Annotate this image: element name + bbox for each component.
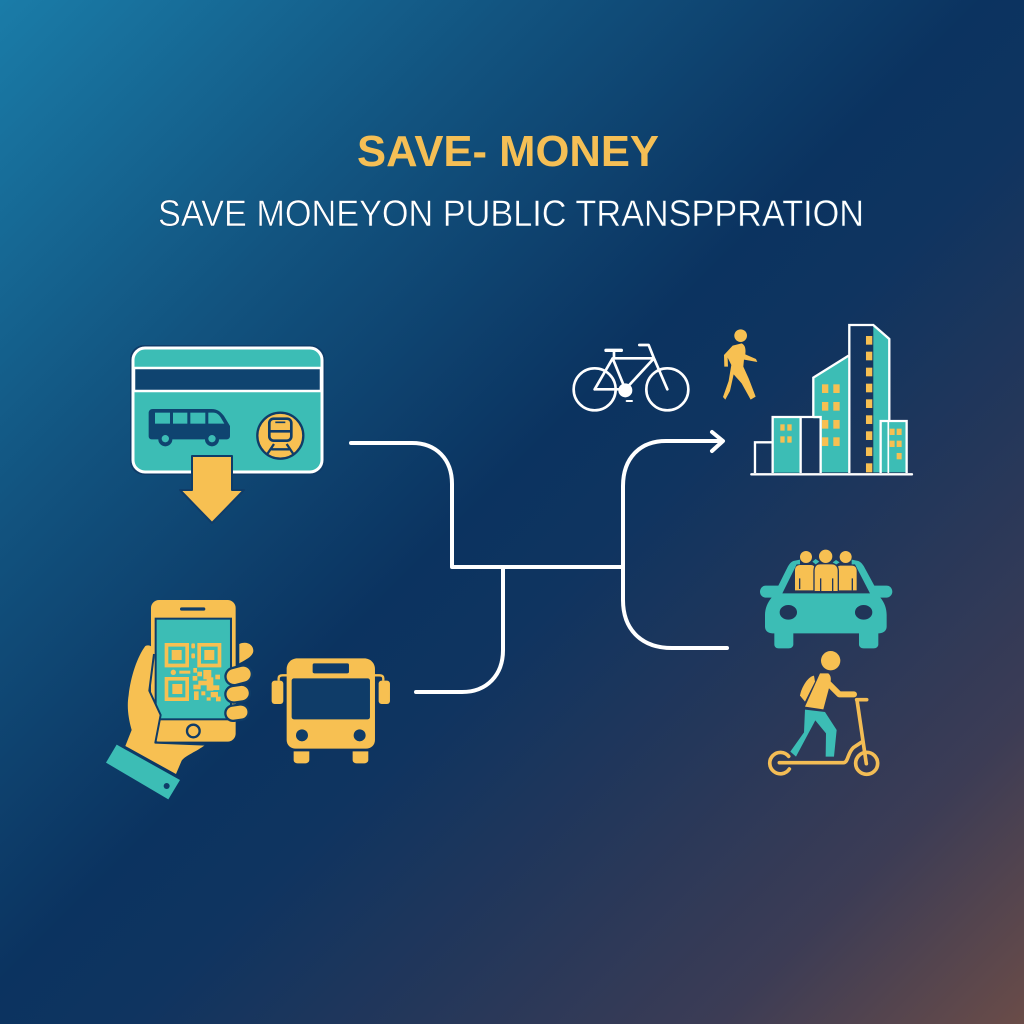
icon: car with passengers [760,550,892,648]
icon: person on kick scooter [770,651,878,774]
icon: city buildings [751,325,912,474]
hand [125,645,205,774]
icon: down arrow [180,456,244,523]
icon: bicycle [574,345,688,410]
flow connector lines [351,432,727,692]
subtitle: SAVE MONEYON PUBLIC TRANSPPRATION [158,193,864,234]
icon: card train badge [257,413,303,459]
title: SAVE- MONEY [357,127,659,176]
teal building fills [813,356,848,472]
passengers [795,550,857,592]
windows [780,336,902,472]
icon: transit card [130,345,325,475]
legs [790,710,837,757]
icon: card bus [149,409,230,446]
QR code [165,643,221,701]
car body [760,560,892,648]
baseline [751,471,912,478]
fingers [239,643,253,663]
icon: walking person [723,329,757,400]
phone body [151,600,236,742]
torso and head [821,651,840,670]
scooter [770,700,878,774]
cuff [106,745,180,799]
icon: hand holding phone with QR code [106,600,254,799]
icon: bus front [272,658,390,763]
phone screen [156,619,231,719]
